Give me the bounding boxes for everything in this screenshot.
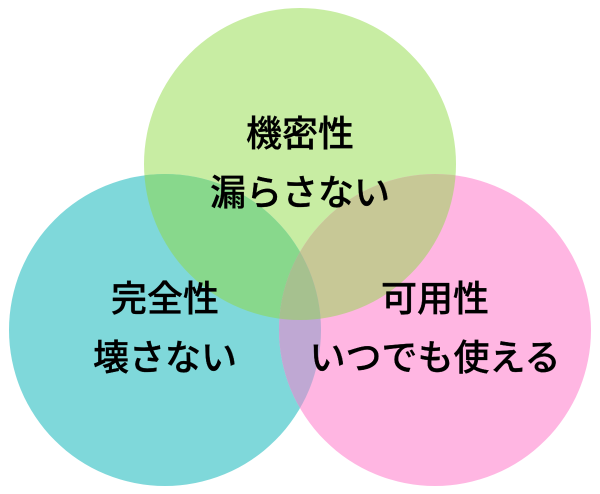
label: confidentiality xyxy=(210,113,390,213)
overlap: confidentiality and integrity xyxy=(144,174,300,319)
circle: integrity xyxy=(9,174,321,486)
label: integrity xyxy=(93,278,237,378)
label: availability xyxy=(310,278,560,378)
overlap: all three xyxy=(280,252,320,320)
label: confidentiality: 機密性 xyxy=(246,113,354,154)
overlap: integrity and availability xyxy=(279,252,321,408)
label: integrity: 壊さない xyxy=(93,337,237,378)
label: confidentiality: 漏らさない xyxy=(210,172,390,213)
label: availability: 可用性 xyxy=(381,278,489,319)
circle: availability xyxy=(279,174,591,486)
circle: confidentiality xyxy=(144,8,456,320)
overlap: confidentiality and availability xyxy=(280,174,456,319)
label: integrity: 完全性 xyxy=(111,278,219,319)
label: availability: いつでも使える xyxy=(310,337,560,378)
